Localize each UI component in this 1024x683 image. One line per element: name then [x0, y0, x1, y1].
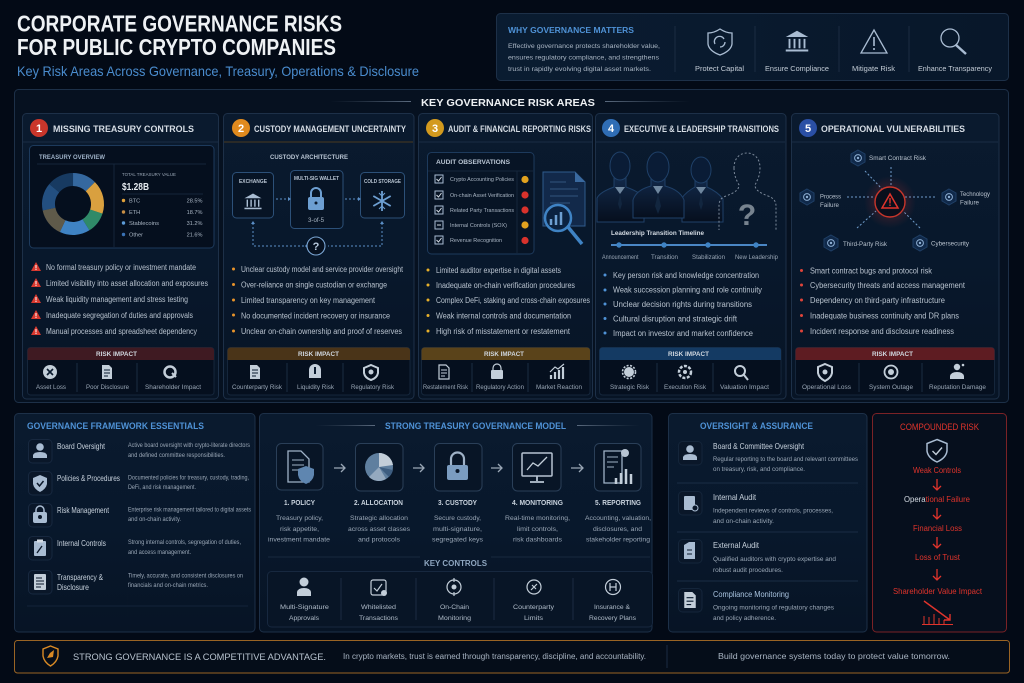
exchange node: [232, 172, 274, 218]
impact: strategic risk: Strategic Risk: [610, 384, 650, 391]
node: smart contract risk: Smart Contract Risk: [869, 155, 927, 162]
step 5 reporting: disclosures, and: [593, 526, 643, 533]
step 5 reporting: stakeholder reporting: [586, 536, 651, 544]
impact: restatement risk: [423, 365, 469, 391]
chart legend: [122, 198, 203, 238]
control: multi-signature approvals: [280, 578, 330, 622]
step 1 policy: investment mandate: [268, 536, 331, 544]
leadership transition timeline: [602, 230, 778, 261]
node: technology failure: Failure: [960, 200, 979, 206]
impact: liquidity risk: Liquidity Risk: [297, 384, 335, 391]
item: transparency and disclosure: Disclosure: [57, 582, 89, 592]
item: transparency and disclosure: Transparency &: [57, 572, 103, 582]
leadership transition timeline: Announcement: [602, 254, 639, 261]
impact: execution risk: Execution Risk: [664, 384, 707, 391]
item: internal audit: Independent reviews of controls, processes,: [713, 508, 833, 514]
impact: shareholder impact: Shareholder Impact: [145, 384, 201, 391]
arrow: [571, 464, 583, 472]
node: cybersecurity: [913, 235, 970, 251]
icon: ensure compliance: [765, 31, 829, 73]
risk list 2: No documented incident recovery or insurance: [241, 312, 390, 320]
icon: enhance transparency: Enhance Transparency: [918, 66, 993, 73]
treasury overview chart panel: [30, 146, 214, 248]
icon: document with magnifier: [543, 172, 585, 244]
impact: valuation impact: [720, 366, 769, 391]
risk impact 5: [796, 348, 994, 395]
step 4 monitoring: Real-time monitoring,: [505, 515, 570, 522]
leadership transition timeline: Stabilization: [692, 254, 725, 261]
silhouette: unknown successor: ?: [738, 199, 756, 232]
cold storage node: COLD STORAGE: [364, 179, 401, 185]
question node: [307, 237, 325, 255]
item: internal controls: [28, 536, 241, 560]
risk list 1: No formal treasury policy or investment mandate: [46, 263, 196, 272]
risk impact 2: RISK IMPACT: [298, 351, 340, 358]
silhouette: unknown successor: [719, 153, 776, 232]
step 1 policy: risk appetite,: [280, 526, 319, 533]
impact: asset loss: Asset Loss: [36, 384, 66, 391]
node: technology failure: Technology: [960, 191, 991, 198]
icon: ensure compliance: Ensure Compliance: [765, 66, 829, 73]
title: CORPORATE GOVERNANCE RISKS: [17, 10, 342, 36]
panel: 5 operational vulnerabilities: [792, 114, 999, 399]
item: board and committee oversight: Board & Committee Oversight: [713, 441, 805, 451]
icon: enhance transparency: [918, 29, 993, 73]
panel: strong treasury governance model: [260, 414, 652, 632]
audit observations table: Crypto Accounting Policies: [450, 177, 514, 183]
impact: regulatory risk: [351, 365, 395, 391]
arrow: [491, 464, 502, 472]
impact: asset loss: [36, 365, 66, 391]
icon: shield: [43, 646, 58, 666]
panel: 1 missing treasury controls: [22, 114, 218, 399]
panel: 3 audit and financial reporting risks: [418, 114, 592, 399]
chart legend: ETH: [129, 210, 140, 216]
step 4 monitoring: limit controls,: [517, 526, 558, 533]
step 3 custody: segregated keys: [432, 536, 483, 544]
control: whitelisted transactions: Whitelisted: [361, 604, 397, 611]
impact: reputation damage: Reputation Damage: [929, 384, 986, 391]
risk chain: Shareholder Value Impact: [893, 586, 983, 596]
footer statement: In crypto markets, trust is earned through transparency, discipline, and accountability.: [343, 652, 646, 661]
risk impact 1: [28, 348, 214, 395]
risk list 5: Dependency on third-party infrastructure: [810, 296, 946, 305]
central warning icon: [864, 176, 916, 228]
risk list 3: High risk of misstatement or restatement: [436, 327, 571, 336]
risk list 3: Complex DeFi, staking and cross-chain exposures: [436, 296, 590, 305]
icon: shield check: [927, 440, 947, 462]
number badge 3: 3: [432, 123, 438, 135]
control: on-chain monitoring: [438, 578, 472, 622]
step 2 allocation: [348, 444, 410, 544]
risk list 5: Inadequate business continuity and DR plans: [810, 312, 959, 320]
item: compliance monitoring: Ongoing monitoring of regulatory changes: [713, 604, 834, 612]
risk impact 3: [422, 348, 590, 395]
risk impact 2: [228, 348, 410, 395]
exchange node: EXCHANGE: [239, 179, 267, 185]
control: multi-signature approvals: Multi-Signature: [280, 604, 330, 611]
control: multi-signature approvals: Approvals: [289, 615, 319, 622]
number badge 1: [30, 119, 48, 137]
impact: restatement risk: Restatement Risk: [423, 384, 469, 391]
impact: poor disclosure: Poor Disclosure: [86, 384, 129, 391]
illustration: leadership silhouettes: [597, 152, 776, 232]
icon: mitigate risk: [852, 30, 896, 73]
control: counterparty limits: Limits: [524, 615, 543, 622]
risk list 1: Limited visibility into asset allocation and exposures: [46, 279, 208, 288]
step 5 reporting: Accounting, valuation,: [585, 515, 651, 522]
heading: compounded risk: COMPOUNDED RISK: [900, 421, 980, 432]
control: insurance and recovery plans: Recovery Plans: [589, 615, 636, 622]
panel: key governance risk areas: [14, 90, 1008, 402]
item: risk management: Enterprise risk management tailored to digital assets: [128, 506, 251, 514]
impact: operational loss: Operational Loss: [802, 384, 851, 391]
number badge 5: 5: [805, 123, 811, 135]
risk list 3: Inadequate on-chain verification procedures: [436, 281, 575, 290]
risk list 1: Weak liquidity management and stress testing: [46, 295, 188, 304]
step 3 custody: 3. CUSTODY: [438, 498, 477, 507]
icon: protect capital: [695, 29, 744, 73]
impact: operational loss: [802, 364, 851, 391]
donut chart: [38, 169, 108, 239]
risk chain: Weak Controls: [913, 465, 961, 475]
title: [17, 10, 342, 60]
step 4 monitoring: [505, 444, 570, 544]
footer headline: STRONG GOVERNANCE IS A COMPETITIVE ADVANTAGE.: [73, 651, 326, 662]
risk list 1: Inadequate segregation of duties and approvals: [46, 311, 193, 320]
risk list 3: [426, 266, 590, 336]
step 2 allocation: across asset classes: [348, 526, 410, 533]
panel: oversight and assurance: [668, 414, 867, 632]
heading: governance framework essentials: GOVERNANCE FRAMEWORK ESSENTIALS: [27, 421, 205, 432]
control: on-chain monitoring: On-Chain: [440, 604, 470, 611]
impact: poor disclosure: [86, 365, 129, 391]
number badge 2: [232, 119, 250, 137]
node: technology failure: [942, 189, 991, 206]
item: policies and procedures: DeFi, and risk management.: [128, 484, 196, 491]
text block: why governance matters: ensures regulatory compliance, and strengthens: [508, 54, 660, 62]
heading: oversight and assurance: OVERSIGHT & ASSURANCE: [700, 421, 814, 432]
control: insurance and recovery plans: [589, 580, 636, 622]
control: insurance and recovery plans: Insurance &: [594, 604, 631, 611]
arrow: [413, 464, 424, 472]
risk chain: Operational Failure: [904, 494, 970, 504]
item: board oversight: Board Oversight: [57, 441, 106, 451]
item: transparency and disclosure: Timely, accurate, and consistent disclosures on: [128, 572, 243, 580]
impact: regulatory action: [476, 364, 524, 391]
risk impact 5: RISK IMPACT: [872, 351, 914, 358]
item: internal controls: Strong internal controls, segregation of duties,: [128, 539, 241, 546]
panel: governance framework essentials: [14, 414, 255, 632]
leadership transition timeline: Leadership Transition Timeline: [611, 230, 704, 237]
icon: declining chart: [922, 601, 953, 624]
item: policies and procedures: Documented policies for treasury, custody, trading,: [128, 474, 249, 482]
multi-sig wallet node: [290, 170, 343, 228]
item: external audit: [678, 540, 837, 574]
risk list 1: [31, 262, 208, 336]
item: internal audit: Internal Audit: [713, 492, 757, 502]
item: board and committee oversight: [678, 441, 858, 473]
radial risk diagram: [800, 150, 991, 251]
item: policies and procedures: Policies & Procedures: [57, 473, 120, 483]
heading: key controls: KEY CONTROLS: [424, 559, 488, 568]
chart legend: 18.7%: [187, 210, 203, 216]
custody architecture diagram: CUSTODY ARCHITECTURE: [270, 154, 349, 161]
risk list 4: Cultural disruption and strategic drift: [613, 314, 738, 324]
node: smart contract risk: [851, 150, 927, 166]
risk list 4: Key person risk and knowledge concentration: [613, 271, 759, 280]
node: cybersecurity: Cybersecurity: [931, 240, 970, 248]
item: external audit: External Audit: [713, 540, 760, 550]
key controls row: [268, 572, 652, 627]
heading: key governance risk areas: KEY GOVERNANCE RISK AREAS: [421, 97, 595, 109]
impact: shareholder impact: [145, 366, 201, 391]
item: transparency and disclosure: [28, 570, 243, 594]
item: risk management: and on-chain activity.: [128, 516, 181, 523]
item: board oversight: and defined committee responsibilities.: [128, 452, 225, 459]
item: board and committee oversight: Regular reporting to the board and relevant committees: [713, 456, 858, 463]
custody architecture diagram: [232, 154, 404, 255]
item: internal audit: and on-chain activity.: [713, 518, 774, 525]
node: third-party risk: [824, 235, 888, 251]
risk list 2: Limited transparency on key management: [241, 296, 376, 305]
chart legend: Other: [129, 232, 143, 238]
heading: strong treasury governance model: STRONG TREASURY GOVERNANCE MODEL: [385, 420, 566, 431]
number badge 2: 2: [238, 123, 244, 135]
risk impact 1: RISK IMPACT: [96, 351, 138, 358]
item: internal controls: and access management.: [128, 549, 191, 556]
risk impact 4: [600, 348, 781, 395]
control: on-chain monitoring: Monitoring: [438, 615, 472, 622]
risk list 5: [800, 266, 966, 336]
text block: why governance matters: Effective governance protects shareholder value,: [508, 43, 660, 50]
item: compliance monitoring: [678, 588, 834, 622]
risk list 4: Unclear decision rights during transitions: [613, 300, 752, 309]
risk list 2: Unclear custody model and service provider oversight: [241, 265, 404, 274]
audit observations table: On-chain Asset Verification: [450, 193, 514, 199]
step 1 policy: Treasury policy,: [276, 515, 323, 522]
impact: liquidity risk: [297, 364, 335, 391]
node: process failure: Process: [820, 194, 841, 200]
cold storage node: [360, 172, 404, 218]
step 2 allocation: 2. ALLOCATION: [354, 498, 403, 507]
risk impact 3: RISK IMPACT: [484, 351, 525, 358]
control: counterparty limits: Counterparty: [513, 604, 555, 611]
question node: ?: [313, 241, 320, 253]
step 4 monitoring: risk dashboards: [513, 536, 562, 544]
leadership transition timeline: Transition: [651, 254, 678, 261]
treasury overview chart panel: TOTAL TREASURY VALUE: [122, 172, 176, 178]
risk list 5: Smart contract bugs and protocol risk: [810, 266, 933, 276]
audit observations table: Internal Controls (SOX): [450, 223, 507, 229]
impact: valuation impact: Valuation Impact: [720, 384, 769, 391]
risk list 5: Cybersecurity threats and access management: [810, 281, 966, 290]
risk chain: Loss of Trust: [915, 552, 961, 562]
card title 5: OPERATIONAL VULNERABILITIES: [821, 124, 965, 135]
icon: mitigate risk: Mitigate Risk: [852, 66, 896, 73]
control: whitelisted transactions: [359, 580, 398, 622]
audit observations table: Revenue Recognition: [450, 238, 502, 244]
chart legend: 21.6%: [187, 232, 203, 238]
impact: regulatory risk: Regulatory Risk: [351, 384, 395, 391]
footer call to action: Build governance systems today to protect value tomorrow.: [718, 652, 950, 661]
step 3 custody: [432, 444, 483, 544]
step 1 policy: [268, 444, 331, 544]
item: board and committee oversight: on treasury, risk, and compliance.: [713, 466, 805, 473]
impact: strategic risk: [610, 366, 650, 391]
card title 1: MISSING TREASURY CONTROLS: [53, 124, 194, 135]
step 5 reporting: 5. REPORTING: [595, 498, 641, 507]
footer banner: [14, 640, 1010, 673]
chart legend: 28.5%: [187, 198, 203, 204]
chart legend: Stablecoins: [129, 221, 159, 227]
risk list 5: Incident response and disclosure readiness: [810, 327, 954, 336]
item: internal audit: [678, 492, 833, 525]
step 3 custody: multi-signature,: [433, 526, 482, 533]
risk list 4: [604, 271, 762, 338]
impact: execution risk: [664, 366, 707, 391]
risk impact 4: RISK IMPACT: [668, 351, 710, 358]
risk list 2: [232, 265, 404, 336]
step 4 monitoring: 4. MONITORING: [512, 498, 563, 507]
multi-sig wallet node: MULTI-SIG WALLET: [294, 176, 340, 182]
dashed connector arrows: [253, 199, 382, 246]
step 1 policy: 1. POLICY: [284, 498, 315, 507]
item: compliance monitoring: Compliance Monitoring: [713, 589, 789, 599]
card title 3: AUDIT & FINANCIAL REPORTING RISKS: [448, 124, 591, 135]
risk chain: [893, 465, 983, 596]
impact: regulatory action: Regulatory Action: [476, 384, 524, 391]
node: third-party risk: Third-Party Risk: [843, 241, 888, 248]
title: FOR PUBLIC CRYPTO COMPANIES: [17, 34, 336, 60]
number badge 5: [799, 119, 817, 137]
step 5 reporting: [585, 444, 651, 544]
impact: market reaction: [536, 364, 582, 391]
impact: counterparty risk: [232, 365, 283, 391]
risk list 4: Impact on investor and market confidence: [613, 329, 754, 338]
card title 4: EXECUTIVE & LEADERSHIP TRANSITIONS: [624, 124, 779, 135]
impact: system outage: [869, 366, 913, 391]
impact: system outage: System Outage: [869, 384, 913, 391]
number badge 4: 4: [608, 123, 615, 135]
number badge 3: [426, 119, 444, 137]
panel: why governance matters: [496, 14, 1008, 80]
text block: why governance matters: trust in rapidly evolving digital asset markets.: [508, 66, 651, 73]
audit observations table: Related Party Transactions: [450, 208, 514, 214]
panel: 4 executive and leadership transitions: [596, 114, 786, 399]
treasury overview chart panel: $1.28B: [122, 182, 149, 193]
impact: market reaction: Market Reaction: [536, 384, 582, 391]
risk list 4: Weak succession planning and role continuity: [613, 286, 762, 294]
multi-sig wallet node: 3-of-5: [308, 218, 325, 224]
risk list 2: Unclear on-chain ownership and proof of reserves: [241, 327, 402, 336]
card title 2: CUSTODY MANAGEMENT UNCERTAINTY: [254, 124, 407, 135]
arrow: [334, 464, 345, 472]
treasury overview chart panel: TREASURY OVERVIEW: [39, 154, 105, 161]
panel: 2 custody management uncertainty: [224, 114, 414, 399]
text block: why governance matters: [508, 43, 660, 73]
item: board oversight: [28, 440, 250, 463]
node: process failure: Failure: [820, 202, 839, 209]
item: policies and procedures: [28, 472, 249, 495]
step 2 allocation: and protocols: [358, 536, 400, 544]
item: external audit: robust audit procedures.: [713, 567, 783, 574]
audit observations table: AUDIT OBSERVATIONS: [436, 159, 511, 166]
number badge 4: [602, 119, 620, 137]
item: transparency and disclosure: financials and on-chain metrics.: [128, 582, 208, 589]
control: whitelisted transactions: Transactions: [359, 615, 398, 622]
risk list 3: Limited auditor expertise in digital assets: [436, 266, 561, 275]
risk list 3: Weak internal controls and documentation: [436, 312, 571, 320]
audit observations table: [428, 152, 534, 254]
step 3 custody: Secure custody,: [434, 515, 481, 522]
risk chain: Financial Loss: [913, 523, 962, 533]
impact: reputation damage: [929, 364, 986, 391]
risk list 1: Manual processes and spreadsheet dependency: [46, 327, 197, 336]
item: internal controls: Internal Controls: [57, 538, 106, 548]
item: board oversight: Active board oversight with crypto-literate directors: [128, 442, 250, 449]
item: risk management: [28, 504, 251, 527]
control: counterparty limits: [513, 580, 555, 622]
item: external audit: Qualified auditors with crypto expertise and: [713, 556, 837, 563]
item: compliance monitoring: and policy adherence.: [713, 615, 776, 622]
panel: compounded risk: [872, 414, 1006, 632]
chart legend: BTC: [129, 198, 140, 204]
number badge 1: 1: [36, 123, 42, 135]
step 2 allocation: Strategic allocation: [350, 515, 409, 522]
icon: protect capital: Protect Capital: [695, 66, 744, 73]
item: risk management: Risk Management: [57, 505, 110, 515]
heading: why governance matters: WHY GOVERNANCE MATTERS: [508, 25, 634, 35]
node: process failure: [800, 189, 841, 209]
leadership transition timeline: New Leadership: [735, 254, 778, 261]
impact: counterparty risk: Counterparty Risk: [232, 384, 283, 391]
chart legend: 31.2%: [187, 221, 203, 227]
subtitle: Key Risk Areas Across Governance, Treasury, Operations & Disclosure: [17, 63, 419, 79]
risk list 2: Over-reliance on single custodian or exchange: [241, 280, 387, 290]
